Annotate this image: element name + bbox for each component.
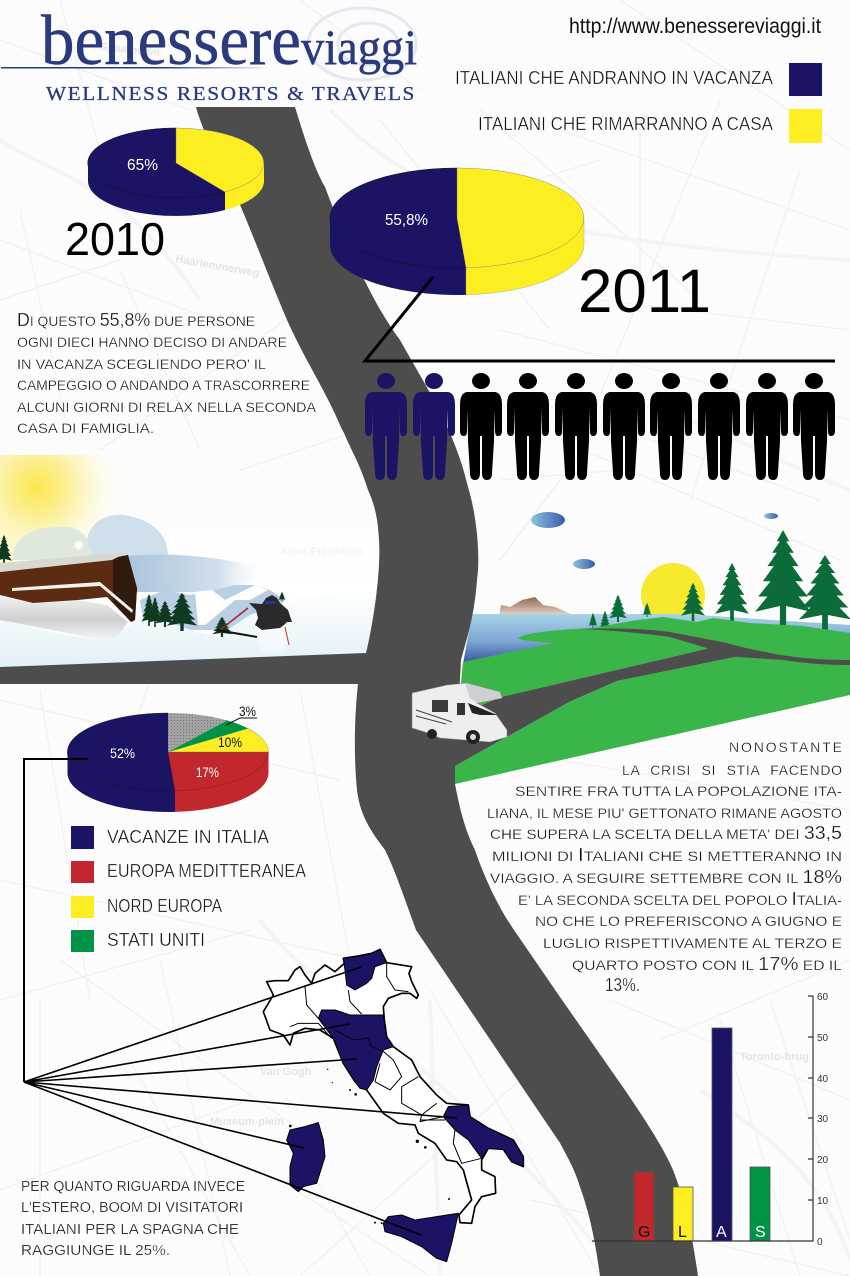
- text: August note: VIAGGIO. A SEGUIRE SETTEMBRE CON IL 18%: [490, 867, 842, 887]
- road: [0, 107, 740, 1276]
- clouds: [531, 512, 778, 569]
- lake: [463, 614, 850, 664]
- label: 55,8%: [385, 212, 428, 229]
- logo wordmark: viaggi: [301, 19, 417, 75]
- legend: destinations: VACANZE IN ITALIA: [107, 827, 269, 847]
- year 2010: 2010: [65, 213, 165, 265]
- axis labels: 50: [817, 1033, 829, 1044]
- text: abroad note: [21, 1178, 245, 1259]
- sun: [641, 563, 705, 627]
- background: faint city map: Haarlemmerweg: [174, 253, 260, 280]
- green fields: [455, 617, 850, 784]
- Emilia-Tuscany border: [335, 1030, 383, 1052]
- pie: destinations: [67, 703, 268, 812]
- text: camping note: IN VACANZA SCEGLIENDO PERO' IL: [17, 356, 266, 372]
- background: faint city map: Anne Frankhuis: [280, 546, 363, 558]
- connector lines to regions: [24, 759, 457, 1235]
- trees: [588, 530, 850, 630]
- axis labels: 10: [817, 1196, 829, 1207]
- background: faint city map: Spaarndam: [100, 41, 161, 59]
- labels: 17%: [196, 764, 219, 780]
- text: August note: E' LA SECONDA SCELTA DEL POPOLO ITALIA-: [518, 889, 842, 909]
- text: August note: SENTIRE FRA TUTTA LA POPOLAZIONE ITA-: [515, 783, 842, 799]
- url: http://www.benessereviaggi.it: [569, 15, 821, 38]
- lake scene: [455, 512, 850, 784]
- text: August note: 13%.: [605, 975, 640, 995]
- text: August note: LUGLIO RISPETTIVAMENTE AL TERZO E: [543, 935, 842, 951]
- legend: destinations: NORD EUROPA: [107, 896, 222, 916]
- axis labels: 40: [817, 1074, 829, 1085]
- region borders: [290, 963, 482, 1163]
- bar letters: A: [716, 1224, 727, 1241]
- legend: destinations: [71, 826, 306, 952]
- text: camping note: ALCUNI GIORNI DI RELAX NELLA SECONDA: [17, 399, 317, 415]
- logo wordmark: benessere: [41, 2, 301, 80]
- labels: [110, 703, 257, 780]
- text: camping note: DI QUESTO 55,8% DUE PERSONE: [17, 310, 255, 330]
- logo: [1, 2, 417, 105]
- legend: vacation vs home: ITALIANI CHE ANDRANNO IN VACANZA: [455, 68, 773, 88]
- text: camping note: OGNI DIECI HANNO DECISO DI ANDARE: [17, 334, 287, 350]
- haze: [125, 555, 270, 592]
- cabin: [0, 552, 137, 622]
- side track: [580, 628, 850, 665]
- text: August note: MILIONI DI ITALIANI CHE SI METTERANNO IN: [492, 845, 842, 865]
- bar letters: S: [755, 1224, 766, 1241]
- background: faint city map: Toronto-brug: [740, 1051, 809, 1063]
- camper: [412, 683, 507, 744]
- axis labels: 20: [817, 1155, 829, 1166]
- text: abroad note: ITALIANI PER LA SPAGNA CHE: [21, 1221, 239, 1238]
- text: August note: LA CRISI SI STIA FACENDO: [622, 762, 842, 778]
- text: August note: QUARTO POSTO CON IL 17% ED IL: [572, 954, 842, 974]
- pie 2011: [330, 168, 584, 295]
- pine trees: [0, 535, 286, 637]
- legend: destinations: EUROPA MEDITTERANEA: [107, 861, 306, 881]
- text: abroad note: RAGGIUNGE IL 25%.: [21, 1242, 170, 1259]
- map of Italy: [263, 949, 523, 1262]
- bars: [634, 1028, 770, 1241]
- logo wordmark: WELLNESS RESORTS & TRAVELS: [46, 83, 416, 105]
- logo wordmark: [1, 2, 417, 105]
- bar letters: [638, 1224, 766, 1241]
- background: faint city map: Museum-plein: [210, 1116, 284, 1128]
- text: abroad note: PER QUANTO RIGUARDA INVECE: [21, 1178, 245, 1195]
- mainland: [263, 949, 523, 1223]
- legend: vacation vs home: [455, 63, 822, 143]
- axis labels: 0: [817, 1237, 823, 1248]
- background: faint city map: V. Diemenstr.: [399, 181, 469, 205]
- navy regions: [287, 949, 523, 1262]
- labels: 3%: [239, 703, 256, 719]
- text: abroad note: L'ESTERO, BOOM DI VISITATORI: [21, 1199, 243, 1216]
- clouds: [13, 515, 168, 580]
- legend: vacation vs home: ITALIANI CHE RIMARRANNO A CASA: [478, 114, 773, 134]
- snow mound: [0, 595, 128, 640]
- people: two in ten: [365, 373, 835, 480]
- text: August note: [487, 739, 842, 995]
- bar letters: L: [678, 1224, 687, 1241]
- text: August note: NO CHE LO PREFERISCONO A GIUGNO E: [535, 913, 842, 929]
- legend: destinations: STATI UNITI: [107, 930, 205, 950]
- text: August note: NONOSTANTE: [729, 739, 842, 755]
- labels: 52%: [110, 745, 135, 761]
- axis labels: [817, 992, 829, 1248]
- logo swirl: [308, 8, 416, 80]
- snow ground: [0, 590, 377, 667]
- sky glow: [0, 455, 135, 565]
- text: camping note: CASA DI FAMIGLIA.: [17, 420, 154, 436]
- callout line: [365, 277, 835, 361]
- text: camping note: CAMPEGGIO O ANDANDO A TRASCORRERE: [17, 377, 310, 393]
- labels: 10%: [218, 734, 242, 750]
- text: camping note: [17, 310, 317, 436]
- pie 2010: [88, 128, 264, 216]
- axes: [592, 996, 813, 1241]
- background: faint city map: Van Gogh: [260, 1066, 312, 1078]
- label: 65%: [127, 157, 158, 174]
- bar letters: G: [638, 1224, 650, 1241]
- text: August note: CHE SUPERA LA SCELTA DELLA META' DEI 33,5: [490, 823, 842, 843]
- text: August note: LIANA, IL MESE PIU' GETTONATO RIMANE AGOSTO: [487, 805, 842, 821]
- ski scene: [0, 455, 385, 667]
- small islands: [289, 1069, 450, 1224]
- axis labels: 60: [817, 992, 829, 1003]
- year 2011: 2011: [578, 257, 711, 325]
- mountains: [140, 585, 285, 630]
- mountain: [499, 597, 575, 628]
- axis labels: 30: [817, 1114, 829, 1125]
- white backdrop: [0, 500, 385, 660]
- bar chart: months: [592, 992, 829, 1248]
- skier: [217, 595, 292, 654]
